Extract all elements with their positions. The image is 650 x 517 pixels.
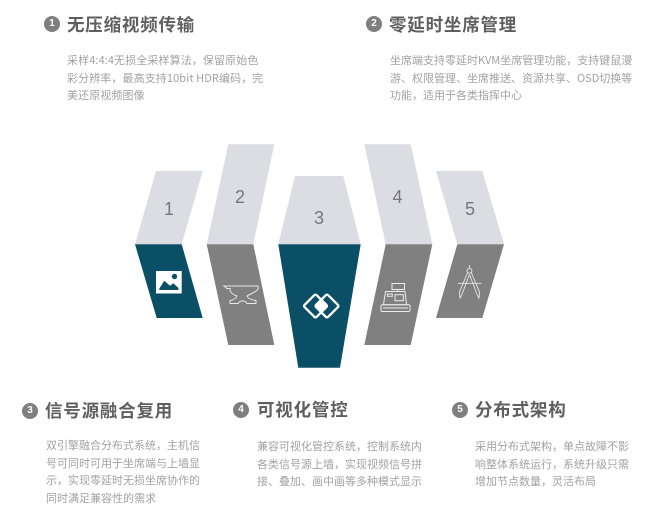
chevron 3: 3 [314,208,324,228]
badge 5 [452,402,468,418]
badge 2: 2 [371,18,377,29]
description 3: 双引擎融合分布式系统，主机信 [46,437,200,453]
description 3: 同时满足兼容性的需求 [46,490,156,506]
badge 1: 1 [49,18,55,29]
chevron 4 [364,144,432,345]
description 5: 采用分布式架构，单点故障不影 [475,438,629,454]
heading 4: 可视化管控 [257,397,348,422]
chevron 4: 4 [392,187,403,207]
badge 4: 4 [238,404,244,415]
description 3: 示，实现零延时无损坐席协作的 [46,472,200,488]
badge 4 [233,402,249,418]
badge 5: 5 [457,404,463,415]
chevron 1: 1 [164,199,174,219]
badge 3: 3 [27,405,33,416]
heading 5: 分布式架构 [475,397,566,422]
chevron 5 [436,171,504,318]
badge 1 [44,16,60,32]
icon: drafting compass [458,265,482,298]
description 5 [475,438,629,489]
heading 2: 零延时坐席管理 [389,12,517,37]
description 2: 功能，适用于各类指挥中心 [390,87,522,103]
description 4: 兼容可视化管控系统，控制系统内 [257,438,422,454]
chevron 5: 5 [465,199,475,219]
chevron 2 [207,144,274,345]
section 3: signal source fusion [22,398,200,506]
section 4: visual control [233,397,422,489]
description 5: 响整体系统运行，系统升级只需 [475,456,629,472]
description 2 [390,52,632,103]
description 5: 增加节点数量，灵活布局 [475,473,596,489]
description 1 [67,52,263,103]
description 1: 美还原视频图像 [67,87,145,103]
chevron 1 [135,171,203,318]
chevron 3 [278,176,361,368]
description 4 [257,438,422,489]
icon: anvil [224,286,258,304]
icon: picture [156,271,182,294]
description 2: 坐席端支持零延时KVM坐席管理功能，支持键鼠漫 [390,52,632,68]
description 4: 各类信号源上墙，实现视频信号拼 [257,456,422,472]
icon: cash register [381,284,410,312]
badge 3 [22,403,38,419]
description 1: 采样4:4:4无损全采样算法，保留原始色 [67,52,258,68]
section 5: distributed architecture [452,397,629,489]
heading 1: 无压缩视频传输 [67,12,195,37]
heading 3: 信号源融合复用 [45,398,173,423]
chevron 2: 2 [235,187,245,207]
description 3 [46,437,200,506]
description 4: 接、叠加、画中画等多种模式显示 [257,473,422,489]
description 3: 号可同时可用于坐席端与上墙显 [46,454,200,470]
section 2: zero latency seat management [366,12,632,103]
icon: interlocking diamonds [303,294,339,318]
description 2: 游、权限管理、坐席推送、资源共享、OSD切换等 [390,70,632,86]
badge 2 [366,16,382,32]
description 1: 彩分辨率，最高支持10bit HDR编码，完 [67,70,263,86]
section 1: uncompressed video transmission [44,12,263,103]
